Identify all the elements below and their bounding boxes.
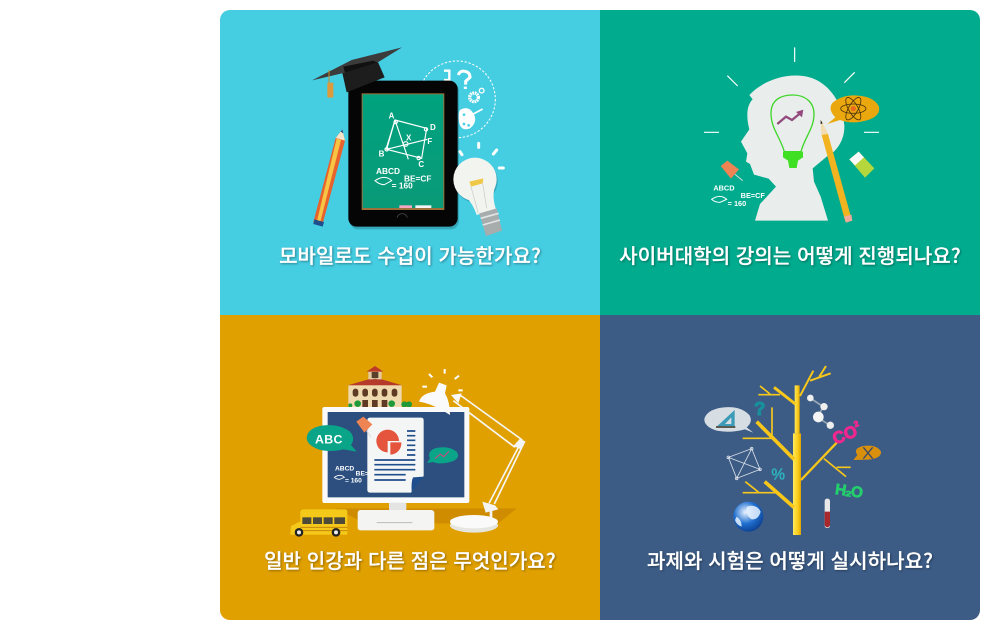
text: chalk formulas: ABCD bbox=[713, 184, 735, 193]
illustration: knowledge tree bbox=[704, 366, 881, 535]
panel: cyber lecture background bbox=[600, 10, 980, 315]
illustration: monitor, school, lamp and bus bbox=[290, 366, 526, 537]
icon: graduation cap bbox=[312, 47, 402, 98]
icon: green bulb outline bbox=[771, 95, 814, 168]
text: chalk formulas: D bbox=[430, 123, 436, 132]
icon: ruler speech bubble bbox=[704, 407, 753, 433]
icon: school building bbox=[348, 366, 412, 407]
icon: question mark: ? bbox=[754, 398, 765, 419]
icon: atom speech bubble bbox=[827, 95, 879, 124]
icon: eraser bbox=[849, 152, 874, 178]
chart: chalk geometry drawing bbox=[375, 120, 428, 185]
text: chalk formulas: BE=CF bbox=[404, 173, 432, 183]
panel: assignments background bbox=[600, 315, 980, 620]
icon: chart speech bubble bbox=[427, 447, 458, 463]
icon: desk shadow bbox=[335, 508, 517, 523]
text: chalk formulas: A bbox=[389, 111, 395, 120]
illustration: child silhouette with bulb bbox=[704, 47, 879, 223]
icon: tree bbox=[743, 366, 851, 535]
text: chalk formulas bbox=[712, 184, 765, 208]
heading: mobile: 모바일로도 수업이 가능한가요? bbox=[279, 240, 541, 269]
icon: school bus bbox=[290, 509, 347, 537]
icon: rising arrow bbox=[777, 114, 799, 124]
text: chalk formulas: ABCD bbox=[376, 166, 400, 176]
text: chalk formulas bbox=[334, 466, 369, 484]
icon: document with pie chart bbox=[367, 418, 424, 493]
icon: push pin bbox=[721, 161, 743, 181]
icon: scissors speech bubble bbox=[853, 446, 881, 460]
icon: dashed circle with symbols bbox=[419, 61, 495, 138]
text: chalk formulas: = 160 bbox=[345, 477, 362, 484]
icon: lamp light rays bbox=[422, 369, 463, 390]
text: chalk formulas: BE= bbox=[356, 471, 369, 478]
icon: desk lamp bbox=[419, 383, 526, 533]
text: chalk formulas: BE=CF bbox=[741, 191, 765, 200]
text: chalk formulas: C bbox=[418, 160, 424, 169]
text: chalk formulas: B bbox=[379, 149, 385, 158]
icon: light bulb bbox=[453, 158, 502, 236]
text: chalk formulas: = 160 bbox=[728, 199, 746, 208]
icon: globe bbox=[733, 502, 763, 532]
icon: molecule bbox=[807, 395, 834, 429]
icon: ABC speech bubble bbox=[307, 425, 357, 452]
heading: difference: 일반 인강과 다른 점은 무엇인가요? bbox=[264, 545, 556, 574]
icon: CO2: 2 bbox=[853, 419, 861, 429]
panel: difference background bbox=[220, 315, 600, 620]
panel: mobile learning background bbox=[220, 10, 600, 315]
heading: assignments: 과제와 시험은 어떻게 실시하나요? bbox=[647, 545, 933, 574]
icon: H2O: H₂O bbox=[834, 481, 864, 502]
icon: pencil bbox=[821, 120, 852, 223]
icon: pencil bbox=[313, 129, 345, 227]
icon: monitor bbox=[322, 407, 469, 530]
icon: test tube bbox=[825, 499, 830, 528]
icon: ABC speech bubble: ABC bbox=[315, 432, 343, 446]
text: chalk formulas bbox=[376, 111, 436, 191]
icon: push pin bbox=[356, 417, 372, 437]
icon: light rays bbox=[460, 143, 503, 168]
icon: geometry drawing bbox=[727, 447, 761, 480]
icon: tablet bbox=[348, 81, 459, 229]
heading: lecture: 사이버대학의 강의는 어떻게 진행되나요? bbox=[619, 240, 961, 269]
text: chalk formulas: X bbox=[406, 134, 412, 143]
icon: percent sign: % bbox=[771, 466, 785, 483]
text: chalk formulas: F bbox=[427, 137, 432, 146]
illustration: tablet with graduation cap, pencil and bulb bbox=[312, 47, 503, 236]
icon: head silhouette bbox=[741, 76, 844, 221]
icon: rays bbox=[704, 47, 879, 132]
text: chalk formulas: ABCD bbox=[335, 466, 354, 473]
text: chalk formulas: = 160 bbox=[392, 181, 413, 191]
icon: CO2: CO bbox=[830, 421, 860, 448]
